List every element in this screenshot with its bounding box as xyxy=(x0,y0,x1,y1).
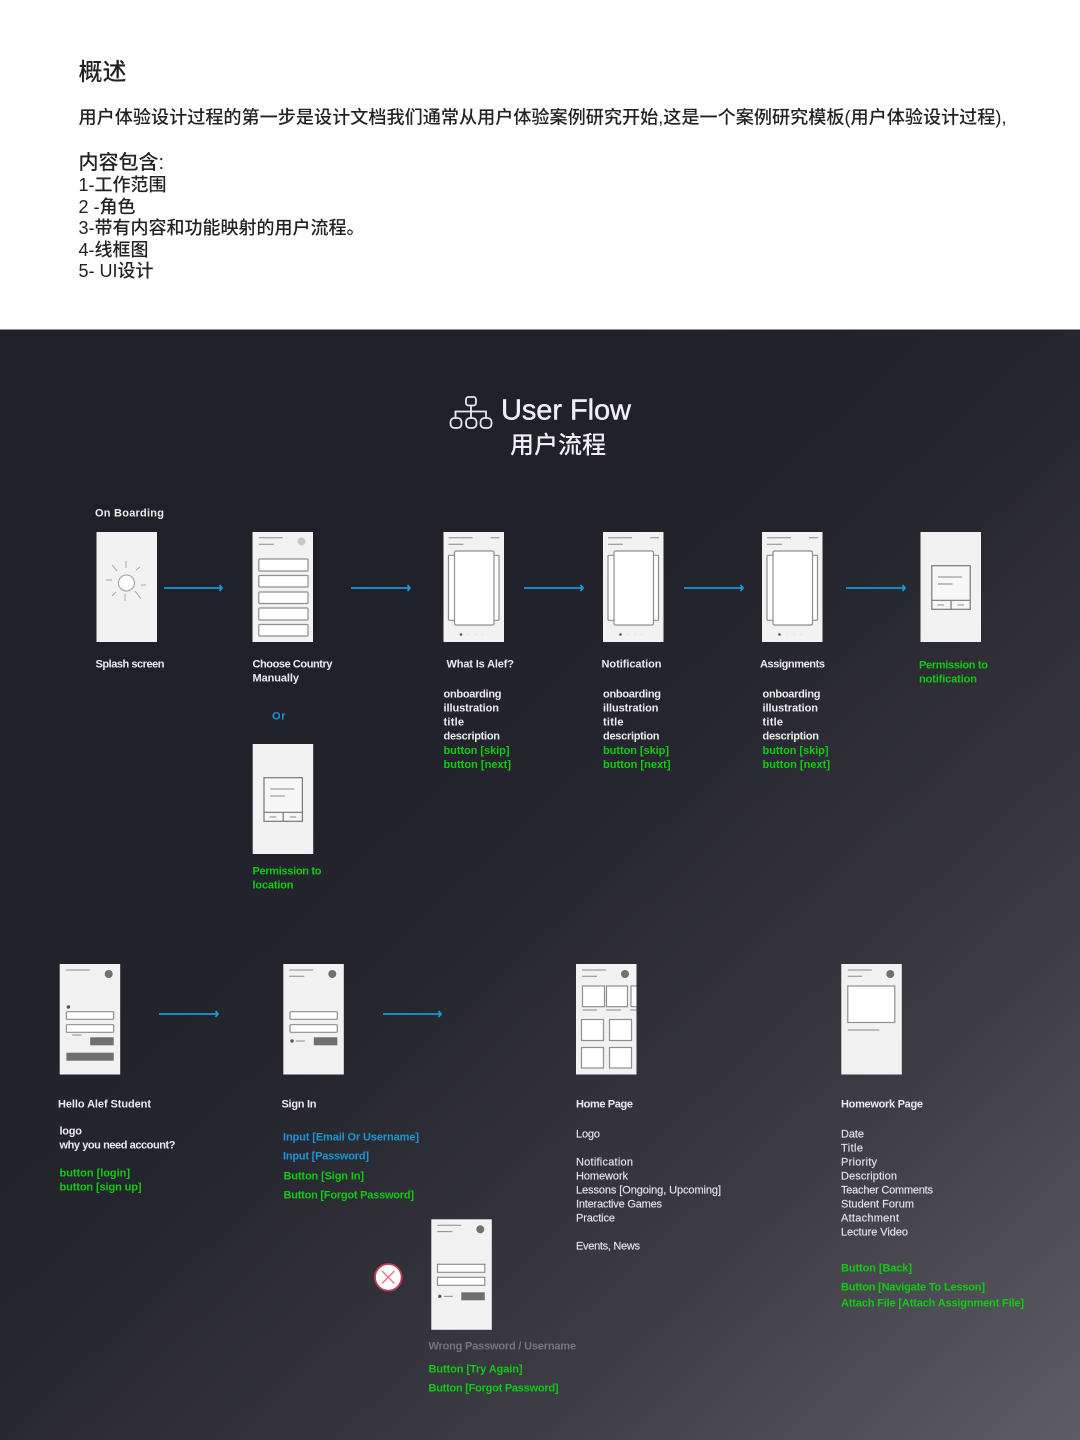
panel: user flow xyxy=(0,330,1080,1440)
icon: error cross xyxy=(375,1264,402,1291)
screen: assignments: description xyxy=(762,730,819,742)
screen: home page xyxy=(576,964,721,1252)
screen: homework page: Date xyxy=(841,1128,864,1140)
screen: sign in: Button [Sign In] xyxy=(284,1170,364,1182)
screen: hello student: button [login] xyxy=(60,1168,130,1180)
screen: homework page xyxy=(841,964,1024,1310)
arrow xyxy=(351,585,410,591)
screen: notification: title xyxy=(603,716,624,728)
screen: homework page: Attach File [Attach Assignment File] xyxy=(841,1298,1024,1310)
screen: sign in: Button [Forgot Password] xyxy=(284,1190,414,1202)
screen: assignments xyxy=(760,532,830,771)
screen: hello student: Hello Alef Student xyxy=(58,1098,151,1110)
screen: permission to location xyxy=(252,744,322,892)
screen: hello student: button [sign up] xyxy=(60,1182,142,1194)
screen: permission to notification xyxy=(919,532,988,686)
screen: homework page: Button [Navigate To Lesson] xyxy=(841,1282,985,1294)
screen: homework page: Homework Page xyxy=(841,1098,923,1110)
screen: notification: illustration xyxy=(603,702,659,714)
screen: permission to location: Permission to xyxy=(252,866,322,878)
arrow xyxy=(846,585,905,591)
screen: assignments: button [next] xyxy=(762,759,830,771)
screen: choose country xyxy=(252,532,333,684)
screen: permission to location: location xyxy=(252,880,294,892)
screen: notification: description xyxy=(603,730,660,742)
screen: notification: Notification xyxy=(602,658,662,670)
screen: assignments: Assignments xyxy=(760,658,825,670)
screen: homework page: Lecture Video xyxy=(841,1226,908,1238)
screen: homework page: Attachment xyxy=(841,1212,899,1224)
heading: On Boarding: On Boarding xyxy=(95,508,164,520)
text block: contents list: 2 -角色 xyxy=(78,197,136,217)
screen: hello student: logo xyxy=(60,1126,82,1138)
screen: assignments: onboarding xyxy=(762,688,820,700)
screen: splash xyxy=(96,532,165,670)
screen: notification: onboarding xyxy=(603,688,661,700)
screen: sign in: Sign In xyxy=(282,1098,317,1110)
screen: home page: Lessons [Ongoing, Upcoming] xyxy=(576,1184,721,1196)
text block: contents list: 5- UI设计 xyxy=(78,261,154,281)
screen: what is Alef xyxy=(444,532,514,771)
screen: notification xyxy=(602,532,671,771)
screen: homework page: Button [Back] xyxy=(841,1262,912,1274)
screen: permission to notification: Permission to xyxy=(919,660,988,672)
screen: sign in xyxy=(282,964,419,1202)
arrow xyxy=(684,585,743,591)
screen: home page: Interactive Games xyxy=(576,1198,662,1210)
screen: hello student xyxy=(58,964,176,1194)
screen: sign in: Input [Email Or Username] xyxy=(283,1132,419,1144)
screen: what is Alef: button [next] xyxy=(444,759,511,771)
heading: overview: 概述 xyxy=(78,59,126,86)
arrow xyxy=(159,1011,218,1017)
screen: home page: Events, News xyxy=(576,1240,640,1252)
screen: notification: button [skip] xyxy=(603,745,669,757)
screen: wrong password: Button [Try Again] xyxy=(428,1364,523,1376)
label: Or: Or xyxy=(272,710,286,722)
screen: what is Alef: description xyxy=(444,730,500,742)
screen: notification: button [next] xyxy=(603,759,671,771)
panel: overview xyxy=(78,59,1007,281)
text block: contents list: 内容包含: xyxy=(78,151,164,174)
screen: sign in: Input [Password] xyxy=(283,1150,369,1162)
screen: what is Alef: onboarding xyxy=(444,688,502,700)
arrow xyxy=(383,1011,441,1017)
screen: permission to notification: notification xyxy=(919,674,977,686)
screen: assignments: title xyxy=(762,716,783,728)
screen: homework page: Description xyxy=(841,1170,897,1182)
screen: splash: Splash screen xyxy=(96,658,165,670)
subtitle: 用户流程: 用户流程 xyxy=(510,432,606,459)
screen: assignments: button [skip] xyxy=(762,745,829,757)
screen: what is Alef: What Is Alef? xyxy=(446,658,514,670)
arrow xyxy=(164,585,222,591)
text block: contents list xyxy=(78,151,365,281)
screen: homework page: Priority xyxy=(841,1156,878,1168)
arrow xyxy=(524,585,583,591)
screen: home page: Logo xyxy=(576,1128,600,1140)
screen: assignments: illustration xyxy=(762,702,818,714)
icon: sitemap xyxy=(450,397,492,428)
text block: contents list: 3-带有内容和功能映射的用户流程。 xyxy=(78,218,365,238)
screen: homework page: Title xyxy=(841,1142,863,1154)
screen: homework page: Student Forum xyxy=(841,1198,914,1210)
screen: homework page: Teacher Comments xyxy=(841,1184,934,1196)
screen: choose country: Choose Country xyxy=(252,658,333,670)
screen: what is Alef: illustration xyxy=(444,702,499,714)
screen: what is Alef: button [skip] xyxy=(444,745,510,757)
screen: hello student: why you need account? xyxy=(58,1140,176,1152)
title: User Flow: User Flow xyxy=(501,394,632,426)
screen: what is Alef: title xyxy=(444,716,464,728)
screen: home page: Home Page xyxy=(576,1098,633,1110)
screen: wrong password xyxy=(428,1219,576,1394)
screen: home page: Notification xyxy=(576,1156,633,1168)
screen: home page: Practice xyxy=(576,1212,615,1224)
screen: wrong password: Wrong Password / Username xyxy=(428,1340,576,1352)
text block: introduction: 用户体验设计过程的第一步是设计文档我们通常从用户体验案例研究开始,这是一个案例研究模板(用户体验设计过程), xyxy=(78,106,1007,128)
text block: contents list: 4-线框图 xyxy=(78,240,149,260)
screen: wrong password: Button [Forgot Password] xyxy=(428,1382,559,1394)
screen: choose country: Manually xyxy=(252,672,300,684)
screen: home page: Homework xyxy=(576,1170,628,1182)
text block: contents list: 1-工作范围 xyxy=(78,175,167,195)
